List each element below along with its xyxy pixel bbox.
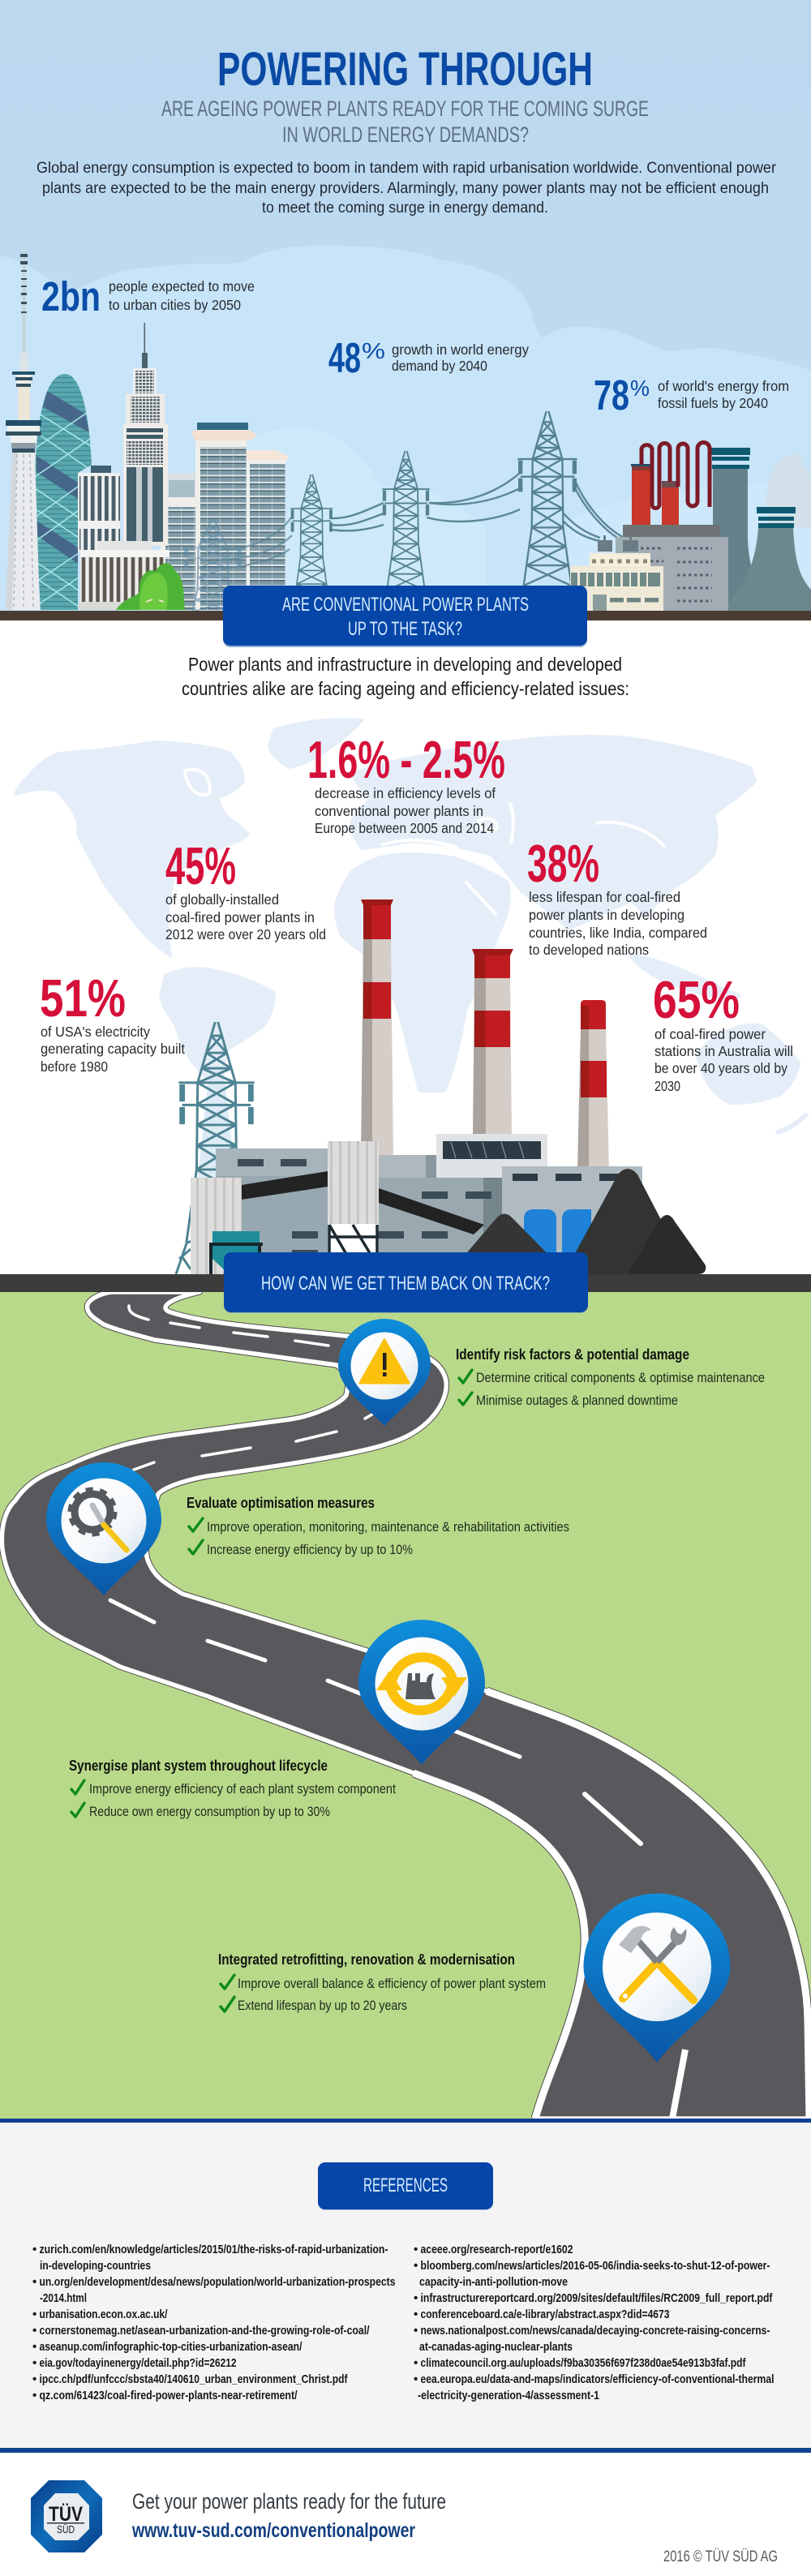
- reference list: left column: cornerstonemag.net/asean-urbanization-and-the-growing-role-of-coal/: [39, 2324, 370, 2338]
- stat: 1.6% - 2.5%: 1.6% - 2.5%: [307, 730, 505, 789]
- heading: references: [318, 2162, 493, 2210]
- reference list: right column: •: [414, 2291, 418, 2305]
- building: right tall block: [191, 423, 257, 610]
- stat: 78%: fossil fuels by 2040: [658, 395, 768, 411]
- cream annex: [570, 553, 663, 611]
- building: pale mid block: [161, 473, 196, 610]
- stat: 38%: [527, 834, 707, 958]
- stat: 51%: generating capacity built: [41, 1041, 185, 1057]
- building D: [502, 1166, 642, 1274]
- chimneys: [361, 899, 609, 1172]
- reference list: left column: zurich.com/en/knowledge/articles/2015/01/the-risks-of-rapid-urbanization-: [39, 2243, 388, 2256]
- stat: 2bn: 2bn: [41, 273, 101, 320]
- icon: lifecycle arrows and plant: [376, 1657, 467, 1711]
- stat: 65%: 65%: [653, 970, 740, 1029]
- cooling tower front: [722, 507, 811, 611]
- stat: 51%: 51%: [40, 968, 126, 1028]
- stat: 38%: to developed nations: [529, 942, 649, 958]
- building: rightmost block: [247, 450, 290, 590]
- reference list: left column: •: [32, 2324, 36, 2338]
- step 3 text: Improve energy efficiency of each plant system component: [89, 1781, 396, 1797]
- intro paragraph: to meet the coming surge in energy demand.: [262, 200, 548, 217]
- stat: 65%: [653, 970, 793, 1094]
- step 1 text: Determine critical components & optimise maintenance: [476, 1370, 765, 1385]
- text block: issues intro: [182, 654, 629, 699]
- step 1 text: Minimise outages & planned downtime: [476, 1393, 678, 1408]
- red chimneys: [631, 464, 679, 525]
- building A: [216, 1148, 328, 1274]
- transformers: [598, 535, 638, 552]
- stat: 1.6% - 2.5%: [307, 730, 505, 836]
- reference list: left column: in-developing-countries: [40, 2259, 151, 2273]
- reference list: left column: •: [32, 2340, 36, 2354]
- title: POWERING THROUGH: [217, 43, 593, 96]
- stat: 2bn: people expected to move: [109, 278, 255, 294]
- pylon wires: [222, 473, 623, 568]
- section heading: are conventional plants: ARE CONVENTIONAL POWER PLANTS: [282, 594, 529, 616]
- intro paragraph: [36, 160, 777, 217]
- chimney 1: [361, 899, 393, 1160]
- stat: 45%: coal-fired power plants in: [165, 909, 315, 925]
- heading: references: REFERENCES: [363, 2175, 448, 2196]
- step 4 text: Improve overall balance & efficiency of power plant system: [238, 1976, 546, 1991]
- building: dark striped block: [78, 466, 120, 552]
- reference list: right column: at-canadas-aging-nuclear-plants: [419, 2340, 573, 2354]
- step 2 text: Improve operation, monitoring, maintenance & rehabilitation activities: [207, 1519, 569, 1535]
- stat: 48%: growth in world energy: [392, 341, 529, 358]
- reference list: right column: -electricity-generation-4/assessment-1: [418, 2389, 599, 2402]
- subtitle: [161, 97, 649, 147]
- stat: 78%: 78: [594, 372, 629, 419]
- reference list: right column: •: [414, 2372, 418, 2386]
- stat: 78%: of world's energy from: [658, 378, 789, 394]
- stat: 45%: 45%: [165, 836, 236, 895]
- icon: hammer and wrench: [619, 1926, 693, 2000]
- footer link: www.tuv-sud.com/conventionalpower: [131, 2519, 415, 2542]
- text block: issues intro: countries alike are facing ageing and efficiency-related issues:: [182, 678, 629, 699]
- stat: 1.6% - 2.5%: Europe between 2005 and 2014: [315, 820, 494, 836]
- stat: 45%: 2012 were over 20 years old: [165, 926, 326, 942]
- text block: issues intro: Power plants and infrastructure in developing and developed: [188, 654, 622, 675]
- power station: [570, 443, 811, 611]
- reference list: right column: conferenceboard.ca/e-library/abstract.aspx?did=4673: [420, 2308, 670, 2321]
- stat: 65%: stations in Australia will: [654, 1043, 793, 1059]
- step 2 text: [187, 1495, 569, 1557]
- pin 2: evaluate: [46, 1462, 161, 1595]
- stat: 38%: less lifespan for coal-fired: [529, 889, 680, 905]
- stat: 48%: [328, 335, 529, 382]
- icon: trees: [116, 563, 185, 610]
- chimney 3: [577, 1000, 609, 1172]
- stat: 51%: before 1980: [41, 1058, 108, 1075]
- reference list: right column: •: [414, 2356, 418, 2370]
- stat: 51%: [40, 968, 185, 1075]
- step 4 text: [218, 1951, 546, 2013]
- step 2 text: Increase energy efficiency by up to 10%: [207, 1542, 413, 1557]
- copyright: 2016 © TÜV SÜD AG: [663, 2548, 778, 2565]
- reference list: left column: •: [32, 2275, 36, 2289]
- reference list: right column: •: [414, 2243, 418, 2256]
- footer divider: [0, 2448, 811, 2453]
- step 4 text: Integrated retrofitting, renovation & modernisation: [218, 1951, 515, 1968]
- step 2 text: Evaluate optimisation measures: [187, 1495, 375, 1511]
- icon: warning triangle: [360, 1340, 409, 1383]
- subtitle: IN WORLD ENERGY DEMANDS?: [282, 122, 529, 147]
- step 4 text: Extend lifespan by up to 20 years: [238, 1998, 407, 2013]
- pylon 1: [290, 474, 333, 599]
- stat: 48%: demand by 2040: [392, 358, 487, 374]
- reference list: left column: ipcc.ch/pdf/unfccc/sbsta40/140610_urban_environment_Christ.pdf: [39, 2372, 348, 2386]
- stat: 48%: %: [362, 338, 385, 363]
- chimney 2: [472, 949, 513, 1140]
- reference list: right column: capacity-in-anti-pollution-move: [419, 2275, 568, 2289]
- step 1 text: Identify risk factors & potential damage: [456, 1346, 689, 1363]
- building C with dark window: [436, 1134, 547, 1178]
- step 1 text: [456, 1346, 765, 1408]
- centre silo: [328, 1141, 379, 1274]
- pylon beside coal plant: [176, 1022, 255, 1274]
- section heading: back on track: HOW CAN WE GET THEM BACK ON TRACK?: [261, 1273, 550, 1294]
- reference list: left column: [32, 2243, 396, 2402]
- building: gherkin: [36, 374, 92, 610]
- stat: 38%: power plants in developing: [529, 907, 684, 923]
- coal power plant: [191, 1134, 706, 1274]
- stat: 38%: countries, like India, compared: [529, 925, 707, 941]
- steam coil pipe: [642, 443, 710, 508]
- city skyline: [6, 251, 290, 624]
- stat: 45%: [165, 836, 326, 942]
- divider band: [0, 2119, 811, 2123]
- footer logo: SÜD: [57, 2523, 75, 2535]
- conveyor belts: [242, 1171, 484, 1234]
- blue tanks: [524, 1209, 591, 1252]
- stat: 65%: of coal-fired power: [654, 1026, 766, 1042]
- smoke: [766, 453, 811, 527]
- reference list: left column: aseanup.com/infographic-top-cities-urbanization-asean/: [39, 2340, 303, 2354]
- building: sky tower: [6, 251, 41, 610]
- pylon 2: [382, 451, 430, 590]
- reference list: left column: urbanisation.econ.ox.ac.uk/: [39, 2308, 168, 2321]
- stat: 65%: 2030: [654, 1078, 680, 1094]
- left silo: [191, 1178, 242, 1274]
- stat: 78%: [594, 372, 789, 419]
- world map: [15, 719, 807, 1133]
- panel: references background: [0, 2119, 811, 2448]
- stat: 51%: of USA's electricity: [41, 1024, 150, 1040]
- section heading: are conventional plants: [223, 586, 587, 647]
- stat: 2bn: to urban cities by 2050: [109, 297, 241, 313]
- reference list: right column: •: [414, 2308, 418, 2321]
- section heading: back on track: [224, 1252, 588, 1313]
- stat: 2bn: [41, 273, 255, 320]
- building: tall spire tower: [123, 323, 168, 546]
- reference list: right column: aceee.org/research-report/e1602: [420, 2243, 573, 2256]
- reference list: left column: un.org/en/development/desa/news/population/world-urbanization-prospects: [39, 2275, 396, 2289]
- stat: 38%: 38%: [527, 834, 599, 893]
- reference list: left column: •: [32, 2372, 36, 2386]
- step 3 text: [69, 1758, 396, 1819]
- main hall: [616, 525, 728, 611]
- panel: white issues section: [0, 620, 811, 1274]
- stat: 1.6% - 2.5%: decrease in efficiency levels of: [315, 785, 496, 801]
- footer tagline: Get your power plants ready for the future: [132, 2489, 446, 2514]
- building B: [378, 1155, 502, 1274]
- footer logo: [31, 2480, 102, 2552]
- reference list: right column: •: [414, 2324, 418, 2338]
- reference list: right column: [414, 2243, 774, 2402]
- dark band: [0, 1274, 811, 1292]
- section heading: are conventional plants: UP TO THE TASK?: [348, 618, 462, 640]
- reference list: left column: •: [32, 2308, 36, 2321]
- stat: 65%: be over 40 years old by: [654, 1060, 787, 1076]
- panel: sky background: [0, 0, 811, 620]
- intro paragraph: plants are expected to be the main energy providers. Alarmingly, many power plants may not be efficient enough: [42, 180, 769, 197]
- pin 3: synergise: [358, 1620, 485, 1765]
- reference list: left column: eia.gov/todayinenergy/detail.php?id=26212: [39, 2356, 237, 2370]
- footer logo: TÜV: [49, 2502, 83, 2526]
- building: ghost pylon: [184, 519, 242, 624]
- reference list: left column: -2014.html: [40, 2291, 87, 2305]
- step 3 text: Synergise plant system throughout lifecycle: [69, 1758, 328, 1774]
- icon: gear and wrench: [70, 1489, 127, 1550]
- reference list: left column: •: [32, 2243, 36, 2256]
- pylon 3: [517, 411, 577, 586]
- reference list: left column: •: [32, 2389, 36, 2402]
- intro paragraph: Global energy consumption is expected to boom in tandem with rapid urbanisation worldwide. Conventional power: [36, 160, 777, 177]
- ground strip: [0, 611, 811, 620]
- stat: 1.6% - 2.5%: conventional power plants in: [315, 803, 483, 819]
- pin 1: warning: [338, 1319, 431, 1426]
- winding road: [2, 1292, 809, 2119]
- cooling tower back: [711, 448, 766, 611]
- teal hopper: [209, 1231, 263, 1274]
- stat: 45%: of globally-installed: [165, 891, 279, 908]
- step 3 text: Reduce own energy consumption by up to 30%: [89, 1804, 330, 1819]
- stat: 78%: %: [630, 376, 650, 401]
- reference list: right column: •: [414, 2259, 418, 2273]
- panel: green road section: [0, 1292, 811, 2119]
- stat: 48%: 48: [328, 335, 361, 382]
- building: low columned block: [79, 541, 169, 610]
- pin 4: retrofit: [584, 1894, 730, 2063]
- coal piles: [448, 1169, 706, 1274]
- reference list: left column: qz.com/61423/coal-fired-power-plants-near-retirement/: [39, 2389, 298, 2402]
- reference list: left column: •: [32, 2356, 36, 2370]
